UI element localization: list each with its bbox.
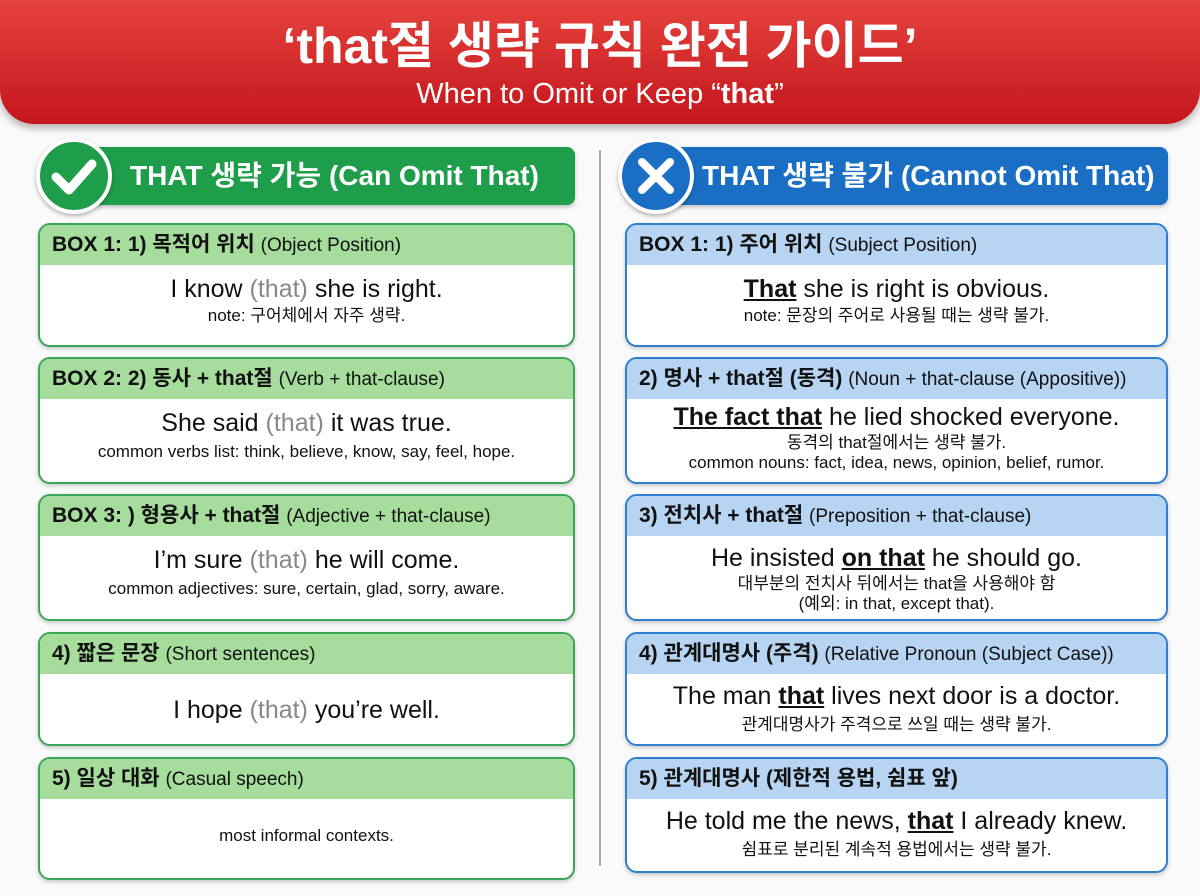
- box 3: (예외: in that, except that).: [799, 594, 994, 613]
- box 4: 4) 관계대명사 (주격) (Relative Pronoun (Subject Case)): [639, 642, 1114, 665]
- box 3: I’m sure (that) he will come.: [154, 546, 459, 574]
- box 1: note: 구어체에서 자주 생략.: [208, 306, 405, 325]
- box 5: 쉼표로 분리된 계속적 용법에서는 생략 불가.: [742, 840, 1051, 859]
- header banner: ‘that절 생략 규칙 완전 가이드’: [282, 18, 918, 74]
- box 5: 5) 일상 대화 (Casual speech): [52, 767, 304, 790]
- heading pill: cannot omit: THAT 생략 불가 (Cannot Omit That): [702, 160, 1154, 191]
- panel: cannot omit: [616, 138, 1170, 877]
- box 5: 5) 관계대명사 (제한적 용법, 쉼표 앞): [639, 767, 958, 790]
- box 5: [38, 757, 575, 880]
- box 2: BOX 2: 2) 동사 + that절 (Verb + that-clause): [52, 367, 445, 390]
- box 4: [38, 632, 575, 746]
- icon: check: [36, 138, 112, 214]
- box 4: 관계대명사가 주격으로 쓰일 때는 생략 불가.: [742, 715, 1051, 734]
- box 2: [38, 357, 575, 484]
- box 4: The man that lives next door is a doctor.: [673, 682, 1120, 710]
- box 2: She said (that) it was true.: [161, 409, 452, 437]
- heading pill: cannot omit: [660, 147, 1168, 205]
- icon: cross: [618, 138, 694, 214]
- box 2: [625, 357, 1168, 484]
- box 1: [625, 223, 1168, 347]
- box 3: 대부분의 전치사 뒤에서는 that을 사용해야 함: [738, 574, 1055, 593]
- box 5: [625, 757, 1168, 873]
- box 2: common verbs list: think, believe, know, say, feel, hope.: [98, 442, 515, 461]
- box 4: 4) 짧은 문장 (Short sentences): [52, 642, 315, 665]
- box 3: [38, 494, 575, 621]
- box 1: [38, 223, 575, 347]
- box 3: 3) 전치사 + that절 (Preposition + that-clause): [639, 504, 1031, 527]
- heading pill: can omit: [90, 147, 575, 205]
- panel: can omit: [34, 138, 578, 884]
- divider: [599, 150, 601, 866]
- box 2: 2) 명사 + that절 (동격) (Noun + that-clause (Appositive)): [639, 367, 1126, 390]
- box 3: BOX 3: ) 형용사 + that절 (Adjective + that-clause): [52, 504, 491, 527]
- box 5: most informal contexts.: [219, 826, 394, 845]
- header banner: [0, 0, 1200, 124]
- header banner: When to Omit or Keep “that”: [416, 78, 784, 110]
- box 3: [625, 494, 1168, 621]
- box 2: The fact that he lied shocked everyone.: [673, 403, 1120, 431]
- box 2: common nouns: fact, idea, news, opinion, belief, rumor.: [689, 453, 1104, 472]
- box 5: He told me the news, that I already knew.: [666, 807, 1127, 835]
- box 4: I hope (that) you’re well.: [173, 696, 440, 724]
- heading pill: can omit: THAT 생략 가능 (Can Omit That): [130, 160, 539, 191]
- box 1: note: 문장의 주어로 사용될 때는 생략 불가.: [744, 306, 1049, 325]
- box 3: common adjectives: sure, certain, glad, sorry, aware.: [108, 579, 505, 598]
- box 3: He insisted on that he should go.: [711, 544, 1082, 572]
- box 1: BOX 1: 1) 주어 위치 (Subject Position): [639, 233, 977, 256]
- box 1: That she is right is obvious.: [744, 275, 1049, 303]
- box 2: 동격의 that절에서는 생략 불가.: [787, 433, 1006, 452]
- box 1: I know (that) she is right.: [170, 275, 443, 303]
- box 4: [625, 632, 1168, 746]
- box 1: BOX 1: 1) 목적어 위치 (Object Position): [52, 233, 401, 256]
